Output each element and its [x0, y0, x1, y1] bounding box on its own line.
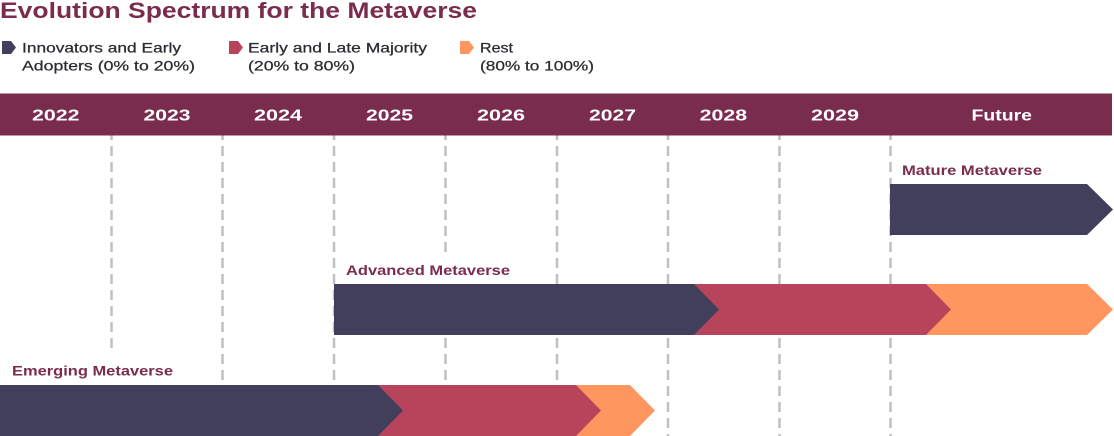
label: mature metaverse: Mature Metaverse	[902, 162, 1042, 178]
arrow: mature dark segment	[890, 184, 1113, 235]
arrow: emerging red segment	[360, 385, 601, 436]
year labels: 2026	[477, 108, 526, 124]
mature metaverse row	[890, 162, 1113, 235]
year labels: 2029	[811, 108, 860, 124]
advanced metaverse row	[334, 257, 1113, 335]
legend text: majority: Early and Late Majority	[248, 40, 427, 56]
legend text: majority: (20% to 80%)	[248, 58, 355, 74]
legend text: rest: (80% to 100%)	[480, 58, 594, 74]
year labels: 2028	[700, 108, 748, 124]
arrow: emerging dark segment	[0, 385, 403, 436]
emerging metaverse row	[0, 354, 655, 436]
icon: dark arrow swatch	[2, 41, 16, 54]
arrow: advanced dark segment	[334, 284, 719, 335]
year labels: 2023	[144, 108, 191, 124]
legend: early and late majority	[229, 40, 427, 74]
arrow: advanced orange segment	[900, 284, 1113, 335]
icon: red arrow swatch	[229, 41, 243, 54]
icon: orange arrow swatch	[460, 41, 474, 54]
legend text: innovators: Innovators and Early	[22, 40, 181, 56]
label: advanced metaverse: Advanced Metaverse	[346, 262, 510, 278]
year labels: 2025	[366, 108, 414, 124]
label: emerging metaverse: Emerging Metaverse	[12, 362, 173, 378]
legend: rest	[460, 40, 594, 74]
year labels: 2024	[254, 108, 303, 124]
arrow: emerging orange segment	[560, 385, 655, 436]
year labels: 2027	[589, 108, 636, 124]
legend text: innovators: Adopters (0% to 20%)	[22, 58, 195, 74]
legend text: rest	[480, 40, 594, 74]
legend text: majority	[248, 40, 427, 74]
legend text: rest: Rest	[480, 40, 513, 56]
legend: innovators and early adopters	[2, 40, 195, 74]
timeline header band	[0, 94, 1112, 136]
year labels	[32, 108, 1032, 124]
legend text: innovators	[22, 40, 195, 74]
year labels: 2022	[32, 108, 80, 124]
arrow: advanced red segment	[680, 284, 951, 335]
year labels: Future	[972, 108, 1032, 124]
